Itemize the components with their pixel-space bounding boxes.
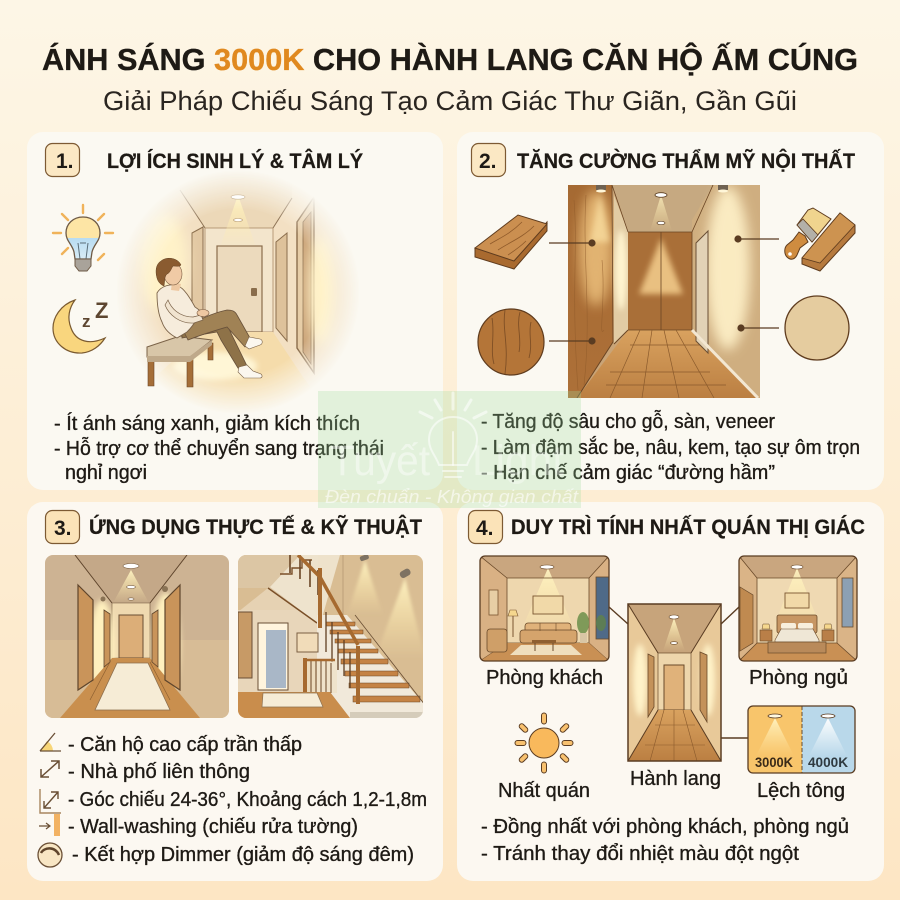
photo: corridor with rug (45, 555, 229, 720)
lower level (258, 623, 288, 690)
callout lines (549, 236, 779, 344)
badge 2: 2. (479, 150, 497, 173)
badge 4: 4. (476, 517, 494, 540)
subtitle: Giải Pháp Chiếu Sáng Tạo Cảm Giác Thư Giãn, Gần Gũi (103, 86, 797, 116)
icon: light bulb (53, 205, 113, 271)
stair treads (317, 615, 423, 718)
heading 1: LỢI ÍCH SINH LÝ & TÂM LÝ (107, 149, 363, 173)
bullet list 1: - Ít ánh sáng xanh, giảm kích thích (54, 412, 360, 435)
watermark: Tuyết (330, 437, 430, 485)
room: bedroom (739, 556, 857, 661)
technical list: - Góc chiếu 24-36°, Khoảng cách 1,2-1,8m (68, 789, 427, 811)
bullet list 1: - Hỗ trợ cơ thể chuyển sang trạng thái (54, 437, 384, 460)
railing (326, 612, 350, 688)
bullet list 2: - Hạn chế cảm giác “đường hầm” (481, 462, 775, 484)
bench (147, 336, 213, 387)
watermark (318, 391, 581, 508)
technical list: - Kết hợp Dimmer (giảm độ sáng đêm) (72, 844, 414, 866)
watermark: Light (472, 437, 564, 485)
bullet list 1 (54, 412, 384, 484)
room labels: Phòng khách (486, 667, 603, 689)
room: hallway (628, 604, 721, 761)
heading 3: ỨNG DỤNG THỰC TẾ & KỸ THUẬT (89, 515, 422, 539)
icon: crescent moon with z letters: z (82, 312, 90, 331)
panel: 2 interior aesthetics (457, 132, 884, 490)
badge 3: 3. (54, 517, 72, 540)
illustration: wood corridor (568, 185, 760, 398)
icon: wood texture circle (478, 309, 544, 375)
badge 2 (472, 144, 506, 176)
panel: 3 practical application and technique (27, 502, 443, 881)
icon: sun (515, 713, 573, 773)
badge 4 (468, 510, 502, 544)
watermark: Đèn chuẩn - Không gian chất (325, 487, 579, 507)
badge 1 (46, 144, 80, 176)
upper stairs (270, 555, 340, 625)
icon: dimmer knob (38, 843, 62, 867)
icon: low ceiling angle (40, 733, 61, 751)
panel: 1 physiological and psychological benefits (27, 132, 443, 490)
watermark bulb (420, 393, 486, 477)
technical list (68, 734, 427, 866)
photo: staircase (238, 554, 425, 718)
bullet list 2: - Làm đậm sắc be, nâu, kem, tạo sự ôm trọn (481, 436, 860, 459)
badge 1: 1. (56, 150, 74, 173)
icon: paint brush on wood (785, 208, 855, 271)
panel: 4 visual consistency (457, 502, 884, 881)
color temperature comparison: 3000K (755, 754, 793, 770)
icon: beige swatch (785, 296, 849, 360)
room labels: Hành lang (630, 768, 721, 790)
technical list: - Căn hộ cao cấp trần thấp (68, 734, 302, 756)
icon: wood plank (475, 215, 547, 269)
man (156, 258, 262, 378)
heading 4: DUY TRÌ TÍNH NHẤT QUÁN THỊ GIÁC (511, 516, 865, 539)
room: living room (480, 556, 609, 661)
badge 3 (46, 510, 80, 544)
title: ÁNH SÁNG 3000K CHO HÀNH LANG CĂN HỘ ẤM CÚNG (42, 41, 858, 77)
icon: wall washing (39, 814, 60, 836)
connector lines (609, 607, 748, 738)
bullet list 4: - Đồng nhất với phòng khách, phòng ngủ (481, 816, 849, 838)
color temperature comparison: 4000K (808, 754, 848, 770)
icon: crescent moon with z letters: Z (95, 298, 108, 323)
bullet list 2 (481, 410, 860, 484)
heading 2: TĂNG CƯỜNG THẨM MỸ NỘI THẤT (517, 149, 855, 173)
room labels: Lệch tông (757, 780, 845, 802)
room labels: Phòng ngủ (749, 667, 848, 689)
technical list: - Nhà phố liên thông (68, 761, 250, 783)
room labels: Nhất quán (498, 780, 590, 802)
bullet list 4 (481, 816, 849, 865)
icon: beam angle axis (40, 789, 61, 813)
icon: crescent moon with z letters (53, 298, 108, 353)
bullet list 2: - Tăng độ sâu cho gỗ, sàn, veneer (481, 410, 775, 433)
icon: double arrow (41, 761, 59, 777)
room labels (486, 667, 848, 802)
bullet list 4: - Tránh thay đổi nhiệt màu đột ngột (481, 843, 799, 865)
color temperature comparison (748, 706, 855, 773)
technical list: - Wall-washing (chiếu rửa tường) (68, 816, 358, 838)
bullet list 1: nghỉ ngơi (65, 462, 147, 484)
illustration: man relaxing in corridor (122, 175, 353, 410)
